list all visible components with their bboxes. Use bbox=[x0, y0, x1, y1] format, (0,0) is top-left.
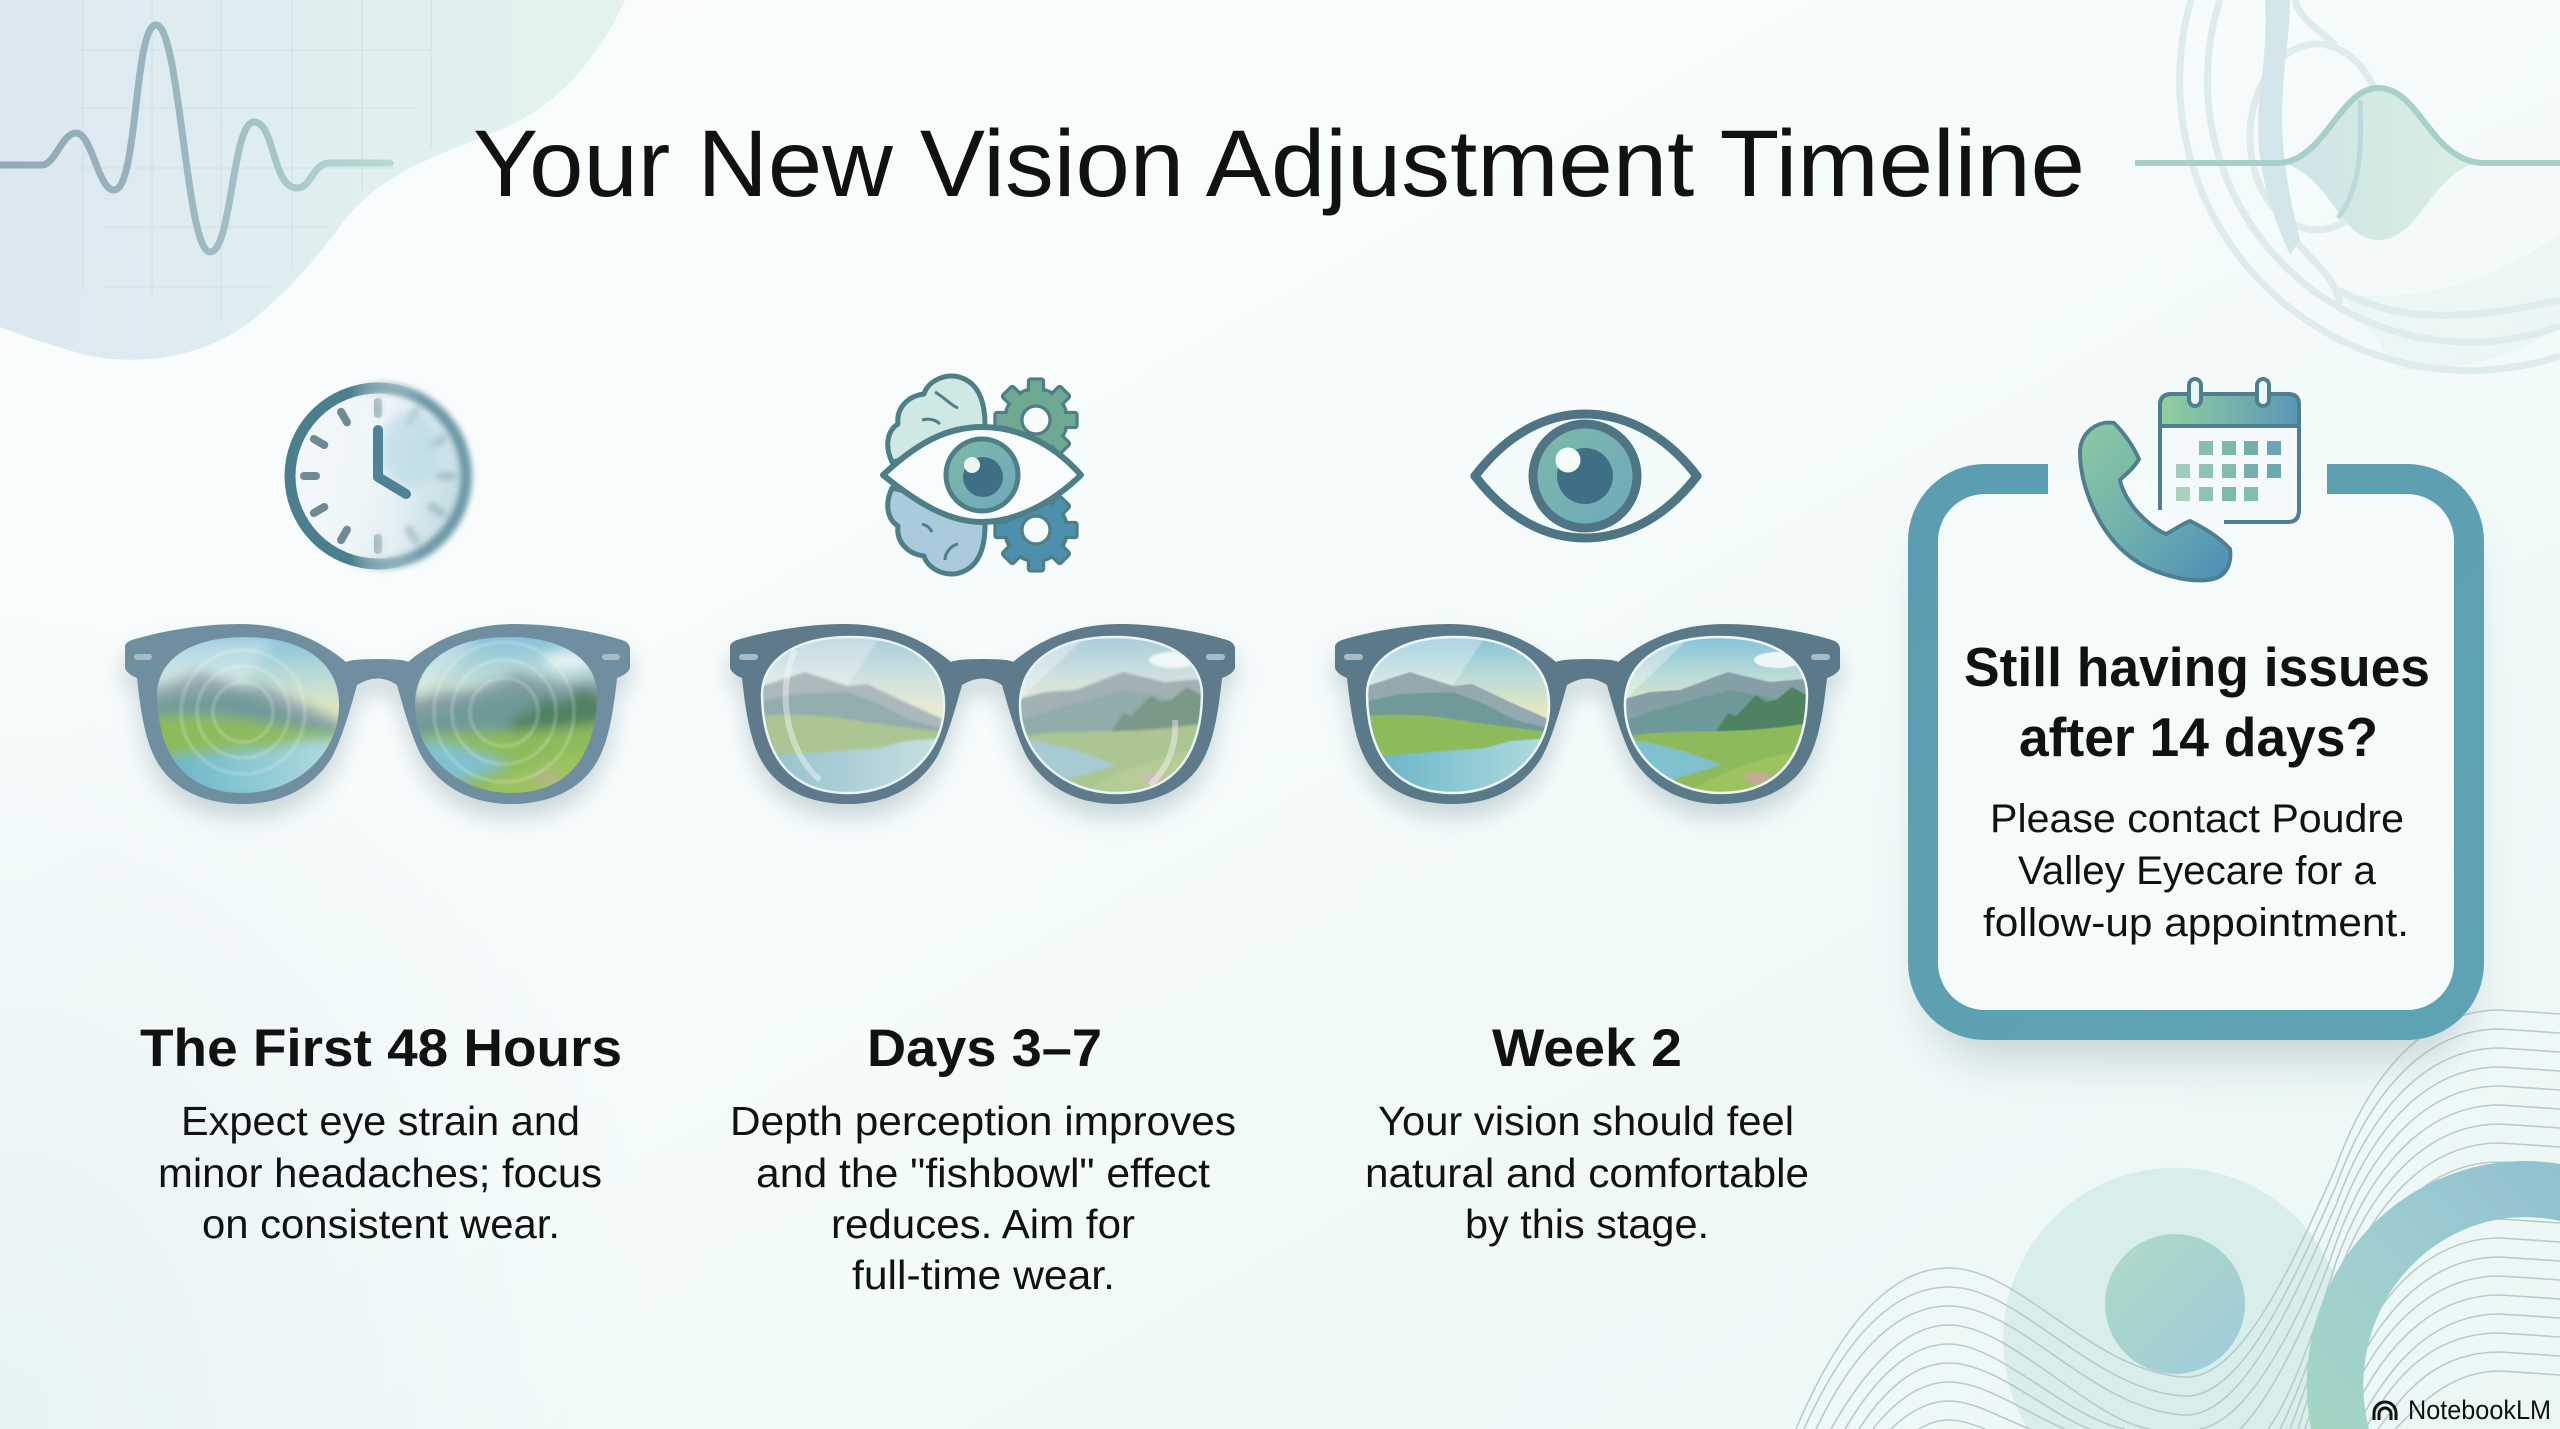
decorative eye cross-section with wave, top right bbox=[2135, 0, 2560, 370]
column: week 2 bbox=[1335, 414, 1840, 1247]
heading: days 3-7: Days 3–7 bbox=[867, 1019, 1102, 1078]
callout heading: Still having issues bbox=[1964, 636, 2430, 698]
glasses: improving view bbox=[730, 624, 1235, 818]
watermark: NotebookLM: NotebookLM bbox=[2408, 1395, 2551, 1425]
description: week 2 bbox=[1365, 1098, 1809, 1247]
glasses: blurry view bbox=[125, 624, 630, 818]
description: week 2: by this stage. bbox=[1465, 1201, 1709, 1247]
callout text: follow-up appointment. bbox=[1983, 901, 2409, 945]
description: first 48 hours: Expect eye strain and bbox=[181, 1098, 580, 1144]
icon: phone and calendar bbox=[2080, 379, 2299, 580]
description: first 48 hours bbox=[158, 1098, 602, 1247]
icon: clear eye bbox=[1475, 414, 1697, 538]
glasses: clear view bbox=[1335, 624, 1840, 818]
description: first 48 hours: minor headaches; focus bbox=[158, 1150, 602, 1196]
callout heading bbox=[1964, 636, 2430, 768]
callout text: Please contact Poudre bbox=[1990, 797, 2404, 841]
column: first 48 hours bbox=[125, 388, 630, 1247]
description: days 3-7 bbox=[730, 1098, 1236, 1298]
description: week 2: natural and comfortable bbox=[1365, 1150, 1809, 1196]
description: week 2: Your vision should feel bbox=[1378, 1098, 1794, 1144]
description: days 3-7: full-time wear. bbox=[852, 1252, 1115, 1298]
callout text bbox=[1983, 797, 2409, 945]
decorative rings and wave lines, bottom right bbox=[1796, 1010, 2560, 1429]
icon: blurred clock bbox=[290, 388, 466, 564]
decorative blob with heartbeat line, top left bbox=[0, 0, 625, 360]
description: first 48 hours: on consistent wear. bbox=[202, 1201, 560, 1247]
description: days 3-7: reduces. Aim for bbox=[831, 1201, 1135, 1247]
heading: week 2: Week 2 bbox=[1492, 1019, 1682, 1078]
title: Your New Vision Adjustment Timeline bbox=[473, 111, 2085, 217]
callout heading: after 14 days? bbox=[2019, 706, 2378, 768]
icon: brain, eye and gears bbox=[883, 376, 1081, 574]
callout text: Valley Eyecare for a bbox=[2018, 849, 2377, 893]
description: days 3-7: and the "fishbowl" effect bbox=[756, 1150, 1211, 1196]
panel: follow-up callout bbox=[1923, 379, 2470, 1060]
description: days 3-7: Depth perception improves bbox=[730, 1098, 1236, 1144]
heading: first 48 hours: The First 48 Hours bbox=[140, 1019, 622, 1078]
column: days 3-7 bbox=[730, 376, 1236, 1298]
